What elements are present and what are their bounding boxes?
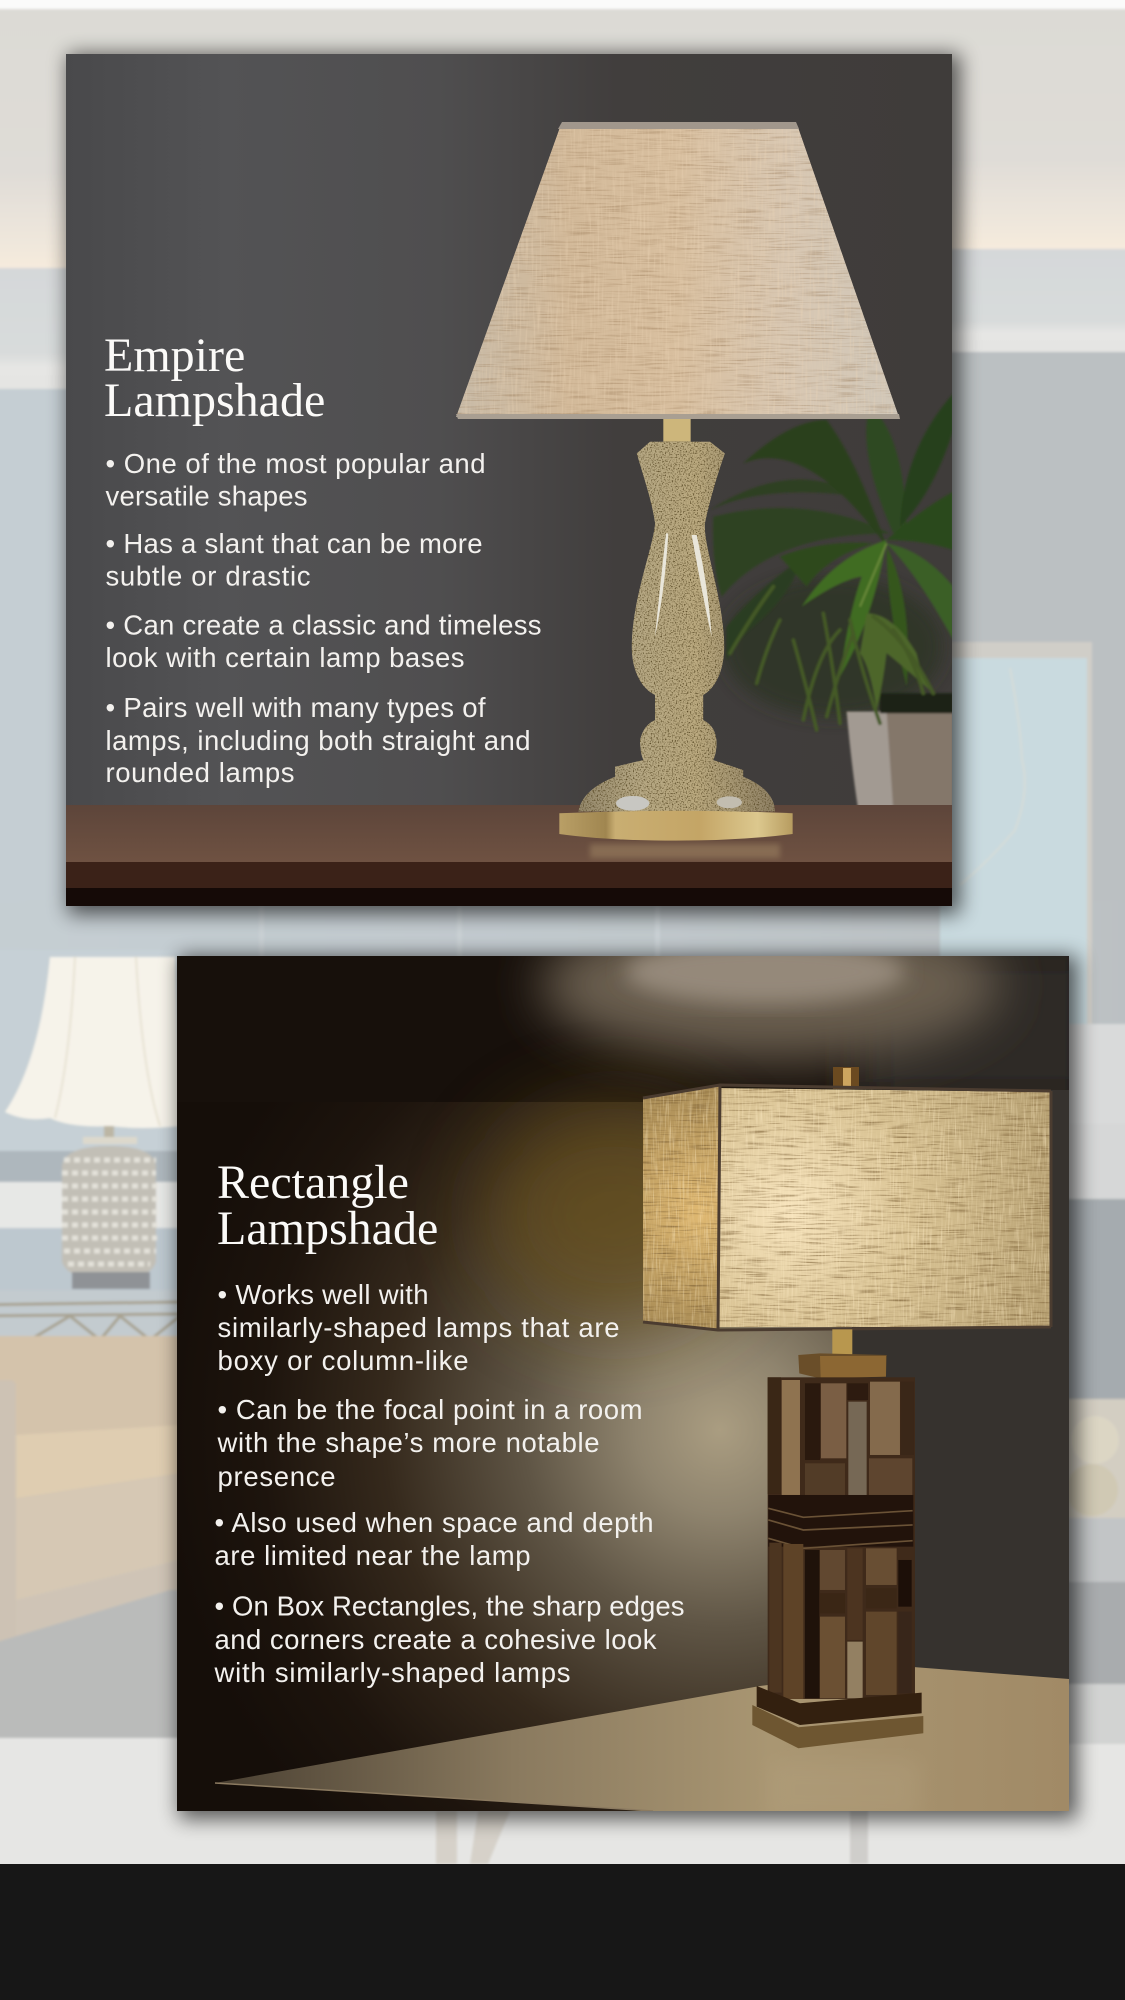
glaze highlights: [616, 533, 742, 811]
table reflection: [770, 1760, 920, 1820]
wall: [66, 54, 952, 814]
bullet list: Empire: lamps, including both straight and: [106, 725, 530, 756]
lamp: ceramic base: [559, 417, 793, 841]
panel shadow: [68, 54, 960, 914]
wall panel moldings: [259, 906, 660, 966]
wooden table: [66, 805, 952, 906]
bullet list: Rectangle: • Can be the focal point in a room: [218, 1394, 642, 1425]
dark right wall: [852, 1090, 1069, 1690]
lampshade: [456, 122, 900, 419]
ceiling left: [0, 9, 570, 269]
bullet list: Rectangle: similarly-shaped lamps that are: [218, 1312, 620, 1343]
ceramic body: [578, 442, 775, 812]
ceiling right: [570, 9, 1125, 249]
background table lamp: [5, 957, 180, 1289]
wall left: [0, 389, 570, 1024]
golden wall glow: [485, 1105, 745, 1325]
left wall and molding: [0, 950, 180, 1298]
right side wainscot and shelf: [1060, 1024, 1125, 1744]
bullet list: Empire: • Pairs well with many types of: [106, 692, 486, 723]
bullet list: Empire: versatile shapes: [106, 480, 308, 512]
brass neck: [663, 417, 691, 442]
lower wall: [0, 900, 1125, 1024]
bullet list: Empire: subtle or drastic: [106, 560, 311, 592]
table surface: [215, 1667, 1069, 1811]
framed map painting: [940, 642, 1092, 1025]
crown molding right: [570, 249, 1125, 352]
crown molding left: [0, 268, 570, 389]
bullet list: Empire: • Has a slant that can be more: [106, 528, 482, 559]
heading: Rectangle Lampshade: Rectangle: [217, 1156, 409, 1209]
glass side table: [0, 1290, 180, 1340]
bullet list: Rectangle: are limited near the lamp: [214, 1540, 530, 1571]
upper right dim wall: [847, 956, 1069, 1090]
heading: Rectangle Lampshade: Lampshade: [217, 1202, 438, 1255]
bullet list: Rectangle: • Also used when space and depth: [214, 1507, 654, 1538]
footer dark band: [0, 1864, 1125, 2000]
lit back wall: [272, 1102, 852, 1811]
heading: Empire Lampshade: [104, 329, 325, 427]
lamp: mosaic base: [752, 1329, 923, 1748]
bullet list: Rectangle: and corners create a cohesive look: [214, 1624, 657, 1655]
ceiling light glow: [540, 910, 1000, 1060]
bullet list: Empire: [106, 448, 542, 788]
rug and floor: [0, 1590, 180, 1740]
bullet list: Rectangle: with similarly-shaped lamps: [214, 1657, 570, 1688]
heading: Empire Lampshade: Lampshade: [104, 374, 325, 427]
bullet list: Empire: rounded lamps: [106, 757, 294, 788]
table legs under panel: [436, 1811, 868, 1864]
bullet list: Rectangle: boxy or column-like: [218, 1345, 468, 1376]
heading: Rectangle Lampshade: [217, 1156, 438, 1255]
bullet list: Empire: • Can create a classic and timeless: [106, 610, 542, 640]
heading: Empire Lampshade: Empire: [104, 329, 245, 382]
bullet list: Rectangle: [214, 1279, 684, 1688]
top white strip: [0, 0, 1125, 9]
bullet list: Rectangle: • On Box Rectangles, the sharp edges: [214, 1590, 684, 1622]
dark room base: [177, 956, 1069, 1102]
brass ring: [559, 811, 793, 841]
lamp: rectangular shade: [643, 1067, 1051, 1330]
bullet list: Rectangle: • Works well with: [218, 1279, 428, 1310]
sofa: [0, 1336, 180, 1660]
panel artwork: [66, 54, 953, 906]
panel: Empire Lampshade: [66, 54, 960, 914]
bullet list: Empire: look with certain lamp bases: [106, 642, 464, 673]
panel shadow: [179, 956, 1077, 1819]
bullet list: Rectangle: presence: [218, 1461, 336, 1492]
wall right: [570, 352, 1125, 1024]
bullet list: Rectangle: with the shape’s more notable: [216, 1427, 600, 1458]
table edge line: [215, 1783, 653, 1811]
plant and pot: [710, 393, 953, 810]
panel artwork: [177, 910, 1100, 1820]
panel: Rectangle Lampshade: [177, 910, 1100, 1820]
bullet list: Empire: • One of the most popular and: [106, 448, 486, 479]
